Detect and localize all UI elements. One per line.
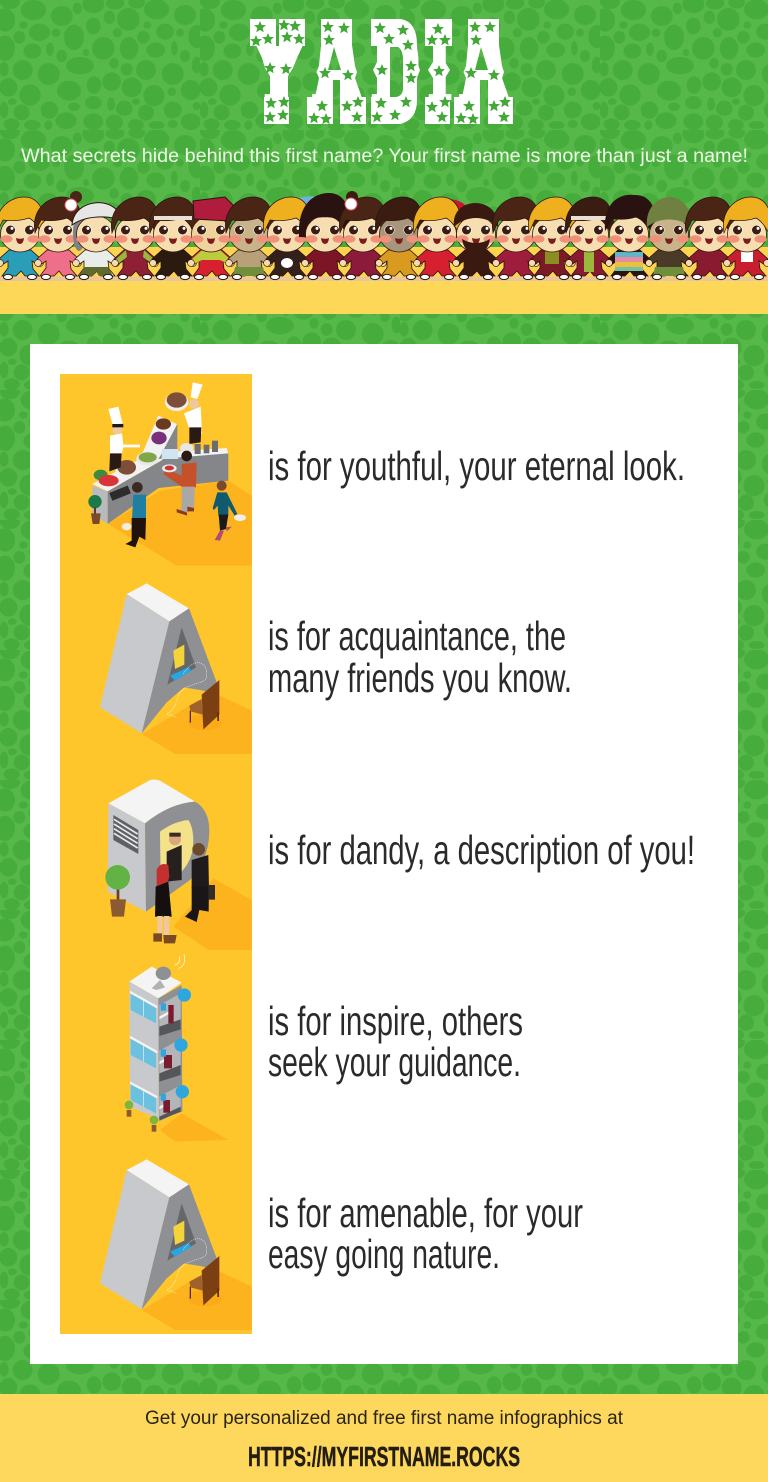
kid 11 [375,197,424,280]
man centre [167,833,182,882]
panel: white card [30,344,738,1364]
icon: letter D building [105,780,252,950]
icon: letter I tower [125,954,228,1142]
kid 9 [299,193,351,280]
title: YADIA [254,8,507,124]
text: line for I: is for inspire, others [268,998,523,1044]
footer [0,1394,768,1482]
woman red hair [153,864,177,943]
kid 10 [339,191,388,280]
icon: buffet counter shaped like Y [88,382,252,566]
text: line for I: seek your guidance. [268,1039,521,1085]
text: line for I [268,998,523,1085]
kid 18 [646,197,692,280]
text: line for A: is for acquaintance, the [268,613,566,659]
kid 5 [149,197,198,280]
kid 16 [565,197,614,280]
kid 4 [111,197,160,280]
text: line for second A: is for amenable, for your [268,1190,583,1236]
woman in teal [213,481,246,541]
footer url: HTTPS://MYFIRSTNAME.ROCKS [248,1441,520,1472]
kid 17 [605,195,655,280]
man in orange [162,443,197,516]
kid 19 [685,197,734,280]
man in blue [122,482,146,547]
kid 2 [34,191,83,280]
kid 3 [72,203,122,280]
kid 13 [453,203,499,280]
yellow illustration column [60,374,252,1334]
text: line for second A: easy going nature. [268,1231,500,1277]
chef right [165,382,203,444]
icon: letter A building [100,583,252,754]
text: line for second A [268,1190,583,1277]
kid 8 [263,196,317,280]
text: line for A: many friends you know. [268,655,572,701]
text: line for A [268,613,572,701]
plants [125,1101,158,1132]
plant [88,495,102,524]
banner: row of children in costumes [0,191,768,314]
icon: second letter A building [100,1159,252,1330]
kid 14 [492,197,541,280]
satellite dish [152,954,185,990]
footer text: Get your personalized and free first name infographics at [145,1408,624,1429]
kid 1 [0,197,45,280]
kid 6 [188,197,239,280]
chef left [108,407,140,471]
tree [105,865,130,917]
kid 12 [413,197,467,280]
kid 7 [225,197,274,280]
subtitle: What secrets hide behind this first name? Your first name is more than just a name! [21,145,748,167]
man right with case [185,843,215,922]
kid 15 [528,197,577,280]
kid 20 [723,197,768,280]
